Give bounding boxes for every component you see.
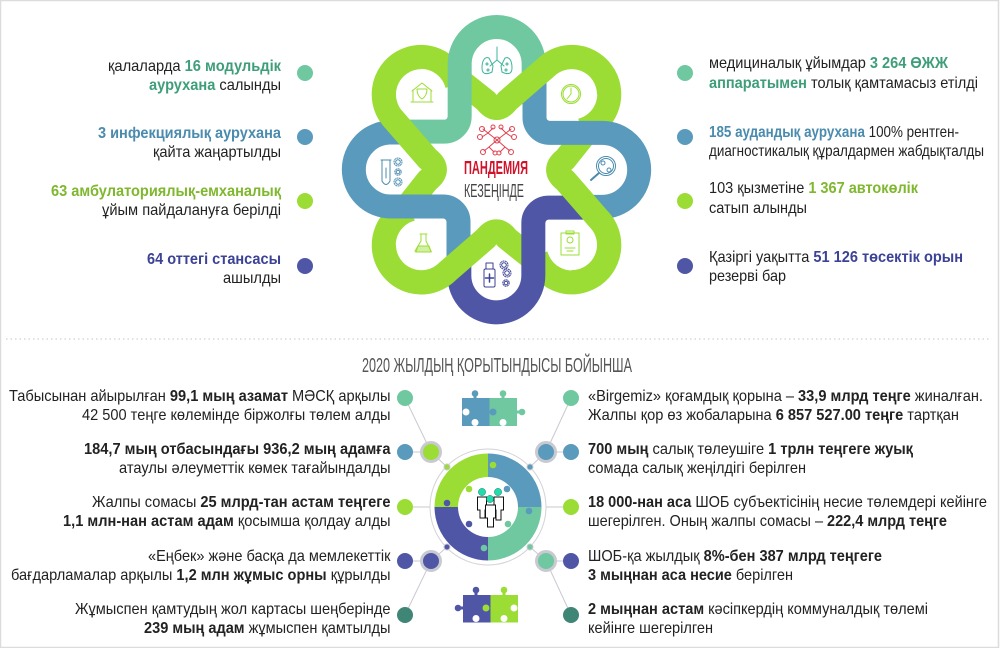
item: infectious hospitals: қайта жаңартылды xyxy=(153,144,281,161)
puzzle donut chart xyxy=(430,449,546,565)
bottom right text column: 700 мың салық төлеушіге 1 трлн теңгеге жуық xyxy=(588,441,914,458)
connector lines xyxy=(405,398,571,615)
icon: spray and viruses xyxy=(484,261,511,287)
top right list xyxy=(677,55,984,285)
item: infectious hospitals: 3 инфекциялық аурухана xyxy=(98,125,281,142)
item: ventilators xyxy=(677,55,978,92)
bottom right text column: сомада салық жеңілдігі берілген xyxy=(588,460,806,477)
icon: top puzzle xyxy=(462,390,525,426)
bottom left text column: «Еңбек» және басқа да мемлекеттік xyxy=(148,548,391,565)
item: ambulances xyxy=(677,180,919,217)
item: ambulances: сатып алынды xyxy=(709,200,807,217)
bottom left text column: 1,1 млн-нан астам адам қосымша қолдау алды xyxy=(63,513,390,530)
icon: house with shield xyxy=(411,83,433,102)
item: modular hospitals: қалаларда 16 модульдік xyxy=(108,58,282,75)
item: outpatient clinics: ұйым пайдалануға берілді xyxy=(102,202,281,219)
icon: clock xyxy=(562,84,580,104)
bottom right text column: ШОБ-қа жылдық 8%-бен 387 млрд теңгеге xyxy=(588,548,882,565)
icon: clipboard xyxy=(561,231,579,255)
item: oxygen stations: 64 оттегі стансасы xyxy=(147,251,281,268)
bottom right text column: кейінге шегерілген xyxy=(588,620,713,637)
item: ambulances: 103 қызметіне 1 367 автокөлік xyxy=(709,180,919,197)
item: ventilators: аппаратымен толық қамтамасыз етілді xyxy=(709,75,978,92)
top left list xyxy=(51,58,313,287)
bottom left text column: 239 мың адам жұмыспен қамтылды xyxy=(144,620,390,637)
item: outpatient clinics: 63 амбулаториялық-емханалық xyxy=(51,183,282,200)
item: outpatient clinics xyxy=(51,183,313,219)
bottom left text column: атаулы әлеуметтік көмек тағайындалды xyxy=(119,460,390,477)
title: pandemic: ПАНДЕМИЯ xyxy=(464,157,528,178)
icon: red virus network xyxy=(478,125,516,155)
ringed connector nodes xyxy=(422,442,556,570)
bottom right text column: 3 мыңнан аса несие берілген xyxy=(588,567,793,584)
bottom right text column: 2 мыңнан астам кәсіпкердің коммуналдық төлемі xyxy=(588,601,928,618)
bottom right text column: «Birgemiz» қоғамдық қорына – 33,9 млрд теңге жиналған. xyxy=(588,388,983,405)
item: ventilators: медициналық ұйымдар 3 264 ӨЖЖ xyxy=(709,55,948,72)
item: modular hospitals: аурухана салынды xyxy=(149,77,281,94)
bottom left text column: Жұмыспен қамтудың жол картасы шеңберінде xyxy=(75,601,391,618)
item: reserve beds: Қазіргі уақытта 51 126 төсектік орын xyxy=(709,249,963,266)
bottom right text column: шегерілген. Оның жалпы сомасы – 222,4 млрд теңге xyxy=(588,513,947,530)
bottom right text column xyxy=(588,388,987,637)
item: district hospitals xyxy=(677,124,984,160)
icon: magnifier xyxy=(591,156,616,180)
bottom right text column: Жалпы қор өз жобаларына 6 857 527.00 теңге тартқан xyxy=(588,407,959,424)
icon: group of people xyxy=(478,488,504,527)
bottom right dots xyxy=(563,390,579,623)
subtitle: during: КЕЗЕҢІНДЕ xyxy=(464,180,524,201)
bottom left text column: бағдарламалар арқылы 1,2 млн жұмыс орны құрылды xyxy=(11,567,390,584)
bottom left text column: Жалпы сомасы 25 млрд-тан астам теңгеге xyxy=(92,494,391,511)
item: infectious hospitals xyxy=(98,125,313,161)
heading: 2020 results: 2020 ЖЫЛДЫҢ ҚОРЫТЫНДЫСЫ БОЙЫНША xyxy=(362,353,632,377)
bottom left text column: 42 500 теңге көлемінде біржолғы төлем алды xyxy=(82,407,390,424)
icon: test tube and viruses xyxy=(381,158,402,186)
item: reserve beds xyxy=(677,249,963,285)
bottom left text column: 184,7 мың отбасындағы 936,2 мың адамға xyxy=(84,441,391,458)
flower ribbon diagram xyxy=(354,27,639,312)
icon: flask xyxy=(415,234,431,252)
icon: lungs xyxy=(482,47,512,74)
item: reserve beds: резерві бар xyxy=(709,268,786,285)
item: oxygen stations: ашылды xyxy=(223,270,281,287)
bottom left text column xyxy=(9,388,391,637)
item: district hospitals: 185 аудандық аурухана 100% рентген- xyxy=(709,124,959,141)
item: modular hospitals xyxy=(108,58,313,94)
icon: bottom puzzle xyxy=(455,587,518,622)
item: oxygen stations xyxy=(147,251,313,287)
bottom left dots xyxy=(397,390,413,623)
bottom left text column: Табысынан айырылған 99,1 мың азамат МӘСҚ арқылы xyxy=(9,388,390,405)
